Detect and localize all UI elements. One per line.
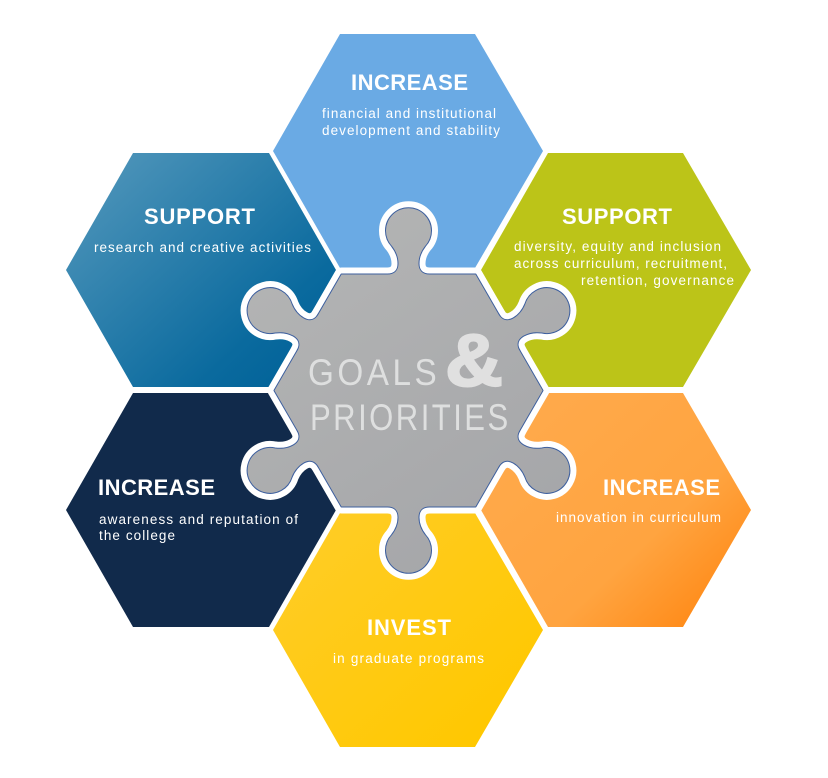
text: diversity, equity and inclusion across curriculum, recruitment, retention, governance: retention, governance [581, 273, 734, 288]
text: innovation in curriculum: innovation in curriculum [556, 510, 721, 525]
heading: SUPPORT: SUPPORT [562, 204, 673, 229]
title: GOALS & PRIORITIES: & [445, 319, 503, 402]
text: diversity, equity and inclusion across curriculum, recruitment, retention, governance [514, 239, 734, 288]
panel: support diversity (upper right, olive) [481, 153, 751, 387]
heading: INCREASE: INCREASE [351, 70, 468, 95]
text: in graduate programs: in graduate programs [333, 651, 484, 666]
panel: increase financial development (top, light blue) [273, 34, 543, 268]
panel: invest graduate programs (bottom, yellow) [273, 513, 543, 747]
panel: increase innovation (lower right, orange) [481, 393, 751, 627]
hexagon: navy [66, 393, 336, 627]
text: awareness and reputation of the college: awareness and reputation of [99, 512, 298, 527]
hexagon: light blue [273, 34, 543, 268]
text: financial and institutional development and stability: financial and institutional [322, 106, 496, 121]
title: GOALS & PRIORITIES: GOALS [308, 352, 437, 393]
title: GOALS & PRIORITIES: PRIORITIES [310, 398, 508, 439]
text: diversity, equity and inclusion across curriculum, recruitment, retention, governance: across curriculum, recruitment, [514, 256, 727, 271]
text: awareness and reputation of the college [99, 512, 298, 543]
panel: central puzzle piece [240, 201, 576, 580]
title: GOALS & PRIORITIES [308, 319, 508, 439]
hexagon: teal gradient [66, 153, 336, 387]
heading: INVEST: INVEST [367, 615, 452, 640]
text: diversity, equity and inclusion across curriculum, recruitment, retention, governance: diversity, equity and inclusion [514, 239, 721, 254]
heading: INCREASE: INCREASE [603, 475, 720, 500]
puzzle piece grey fill [248, 208, 570, 573]
hexagon: olive [481, 153, 751, 387]
text: research and creative activities: research and creative activities [94, 240, 311, 255]
puzzle piece thin blue outline [239, 208, 578, 573]
puzzle piece white border [239, 208, 578, 573]
panel: support research (upper left, teal) [66, 153, 336, 387]
heading: SUPPORT: SUPPORT [144, 204, 256, 229]
hexagon: yellow [273, 513, 543, 747]
text: awareness and reputation of the college: the college [99, 528, 175, 543]
hexagon: orange gradient [481, 393, 751, 627]
text: financial and institutional development and stability [322, 106, 500, 138]
panel: increase awareness (lower left, navy) [66, 393, 336, 627]
heading: INCREASE: INCREASE [98, 475, 215, 500]
text: financial and institutional development and stability: development and stability [322, 123, 500, 138]
